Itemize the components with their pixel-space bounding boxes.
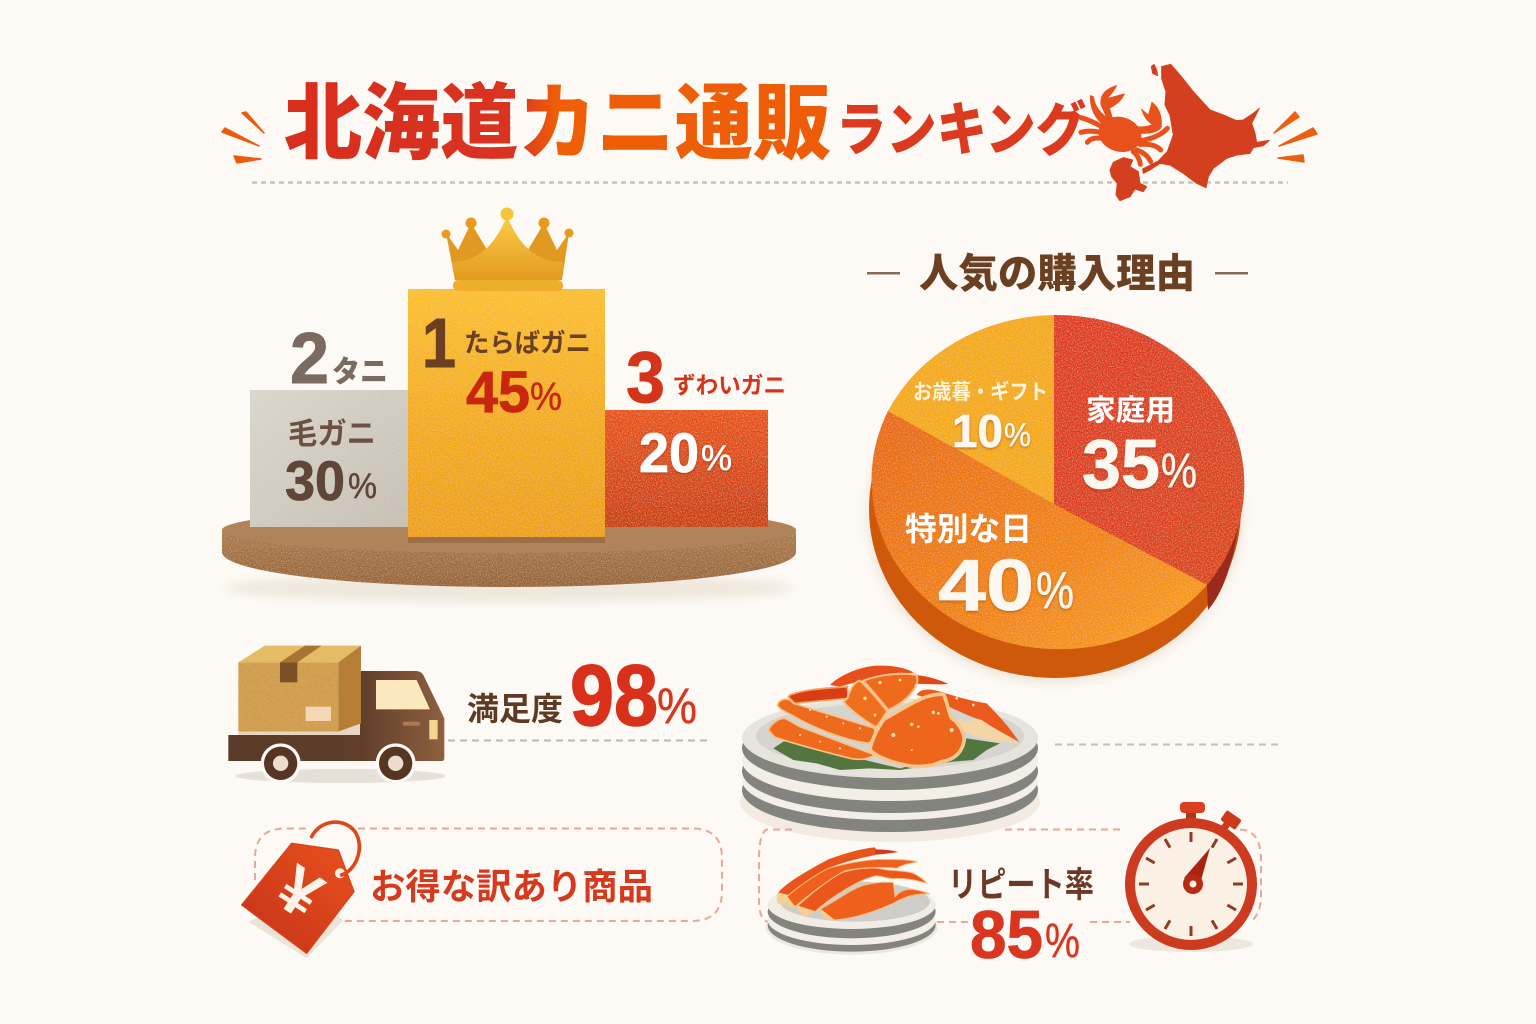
bar: rank 2 <box>250 319 408 527</box>
bar: rank 1: 1 <box>422 304 456 382</box>
icon: delivery truck <box>228 646 446 783</box>
callout: bargain items <box>242 822 722 958</box>
bar: rank 3: 3 <box>626 338 665 418</box>
stat: satisfaction 98%: % <box>657 678 697 734</box>
slice: special day 40%: 40 <box>938 546 1034 626</box>
heading: popular purchase reasons: 人気の購入理由 <box>919 241 1195 299</box>
slice: home use 35%: 家庭用 <box>1086 387 1175 429</box>
title: ランキング <box>836 83 1086 167</box>
icon: Hokkaido map <box>1110 64 1269 201</box>
callout: repeat rate 85%: % <box>1045 915 1080 968</box>
slice: special day 40%: % <box>1036 562 1074 620</box>
bar: rank 3: 20 <box>639 421 699 484</box>
icon: yen price tag <box>242 822 359 958</box>
slice: gifts 10%: お歳暮・ギフト <box>913 376 1048 406</box>
icon: right burst lines <box>1274 112 1317 162</box>
bar: rank 1: たらばガニ <box>464 323 591 360</box>
callout: repeat rate 85% <box>759 802 1261 973</box>
icon: left burst lines <box>222 112 264 163</box>
stat: satisfaction 98%: 満足度 <box>467 684 563 730</box>
icon: yen price tag: ¥ <box>264 852 335 934</box>
platform base <box>222 507 796 602</box>
slice: home use 35%: 35 <box>1082 425 1160 503</box>
crab legs and shell <box>768 666 1019 770</box>
title: 北海道カニ通販 <box>284 56 831 176</box>
bar: rank 1: % <box>530 376 562 419</box>
stat: satisfaction 98%: 98 <box>570 648 658 744</box>
slice: special day 40%: 特別な日 <box>905 504 1032 550</box>
slice: gifts 10%: % <box>1004 417 1031 453</box>
slice: home use 35% <box>1054 315 1244 585</box>
callout: bargain items: お得な訳あり商品 <box>370 858 653 910</box>
slice: special day 40% <box>872 411 1207 649</box>
bar: rank 2: タニ <box>332 347 388 391</box>
bar: rank 1: 45 <box>466 360 530 425</box>
bar: rank 3 <box>605 338 786 527</box>
slice: home use 35%: % <box>1161 445 1197 498</box>
icon: stopwatch <box>1125 802 1257 952</box>
bar: rank 3: ずわいガニ <box>673 366 786 400</box>
slice: gifts 10%: 10 <box>952 405 1003 457</box>
icon: crab <box>1081 85 1167 164</box>
callout: repeat rate 85%: リピート率 <box>948 857 1094 908</box>
bar: rank 2: 2 <box>290 319 329 399</box>
chart: crab ranking podium <box>222 208 796 602</box>
bar: rank 2: 毛ガニ <box>288 409 376 453</box>
pie side <box>867 340 1243 683</box>
icon: crown <box>442 208 574 291</box>
bar: rank 1 <box>408 289 605 543</box>
bar: rank 2: 30 <box>285 449 345 512</box>
bar: rank 2: % <box>348 467 377 506</box>
callout: repeat rate 85%: 85 <box>970 897 1043 973</box>
bar: rank 3: % <box>701 439 732 478</box>
illustration: stacked plates with crab <box>740 666 1040 842</box>
chart: purchase reasons pie <box>867 315 1244 683</box>
stat: satisfaction 98% <box>467 648 697 744</box>
illustration: small plate with crab legs <box>766 847 938 955</box>
slice: gifts 10% <box>888 315 1054 504</box>
